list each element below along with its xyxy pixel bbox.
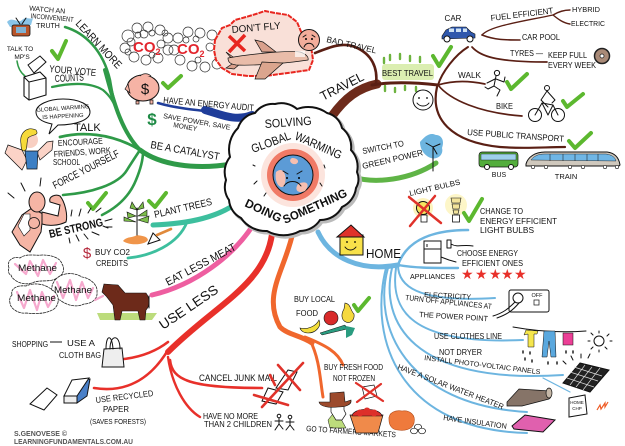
icon: cloth bag bbox=[102, 338, 124, 367]
text: choose energy efficient ones bbox=[457, 249, 523, 268]
public transport group: USE PUBLIC TRANSPORT bbox=[467, 127, 565, 144]
icon: two children bbox=[275, 414, 294, 430]
text: tyres keep full every week: KEEP FULL bbox=[548, 51, 587, 60]
text: buy co2 credits: BUY CO2 bbox=[95, 248, 131, 257]
energy audit group bbox=[125, 74, 255, 133]
text: change to energy efficient light bulbs: CHANGE TO bbox=[480, 207, 523, 216]
text: encourage friends, work, school bbox=[53, 136, 111, 167]
icon: cow bbox=[97, 284, 157, 320]
heading: talk: TALK bbox=[74, 122, 101, 134]
branch: home (light blue) bbox=[318, 230, 570, 433]
text: shopping use a cloth bag: CLOTH BAG bbox=[59, 351, 101, 360]
text: buy fresh food not frozen: NOT FROZEN bbox=[333, 374, 375, 383]
text: encourage friends, work, school: FRIENDS, WORK bbox=[53, 145, 111, 159]
icon: red cross bbox=[229, 35, 245, 52]
text: install photo-voltaic panels: INSTALL PHOTO-VOLTAIC PANELS bbox=[424, 355, 541, 376]
walk group bbox=[458, 70, 527, 96]
tick: walk bbox=[507, 74, 527, 89]
text: use recycled paper saves forests: USE RECYCLED bbox=[95, 388, 154, 405]
icon: green dollar: $ bbox=[147, 110, 157, 129]
branch: travel (brown) bbox=[315, 10, 570, 148]
icon: power point switch bbox=[493, 290, 549, 318]
home group bbox=[337, 177, 612, 432]
text: go to farmers markets: GO TO FARMERS MARKETS bbox=[306, 424, 396, 439]
text: save power, save money: SAVE POWER, SAVE bbox=[163, 113, 231, 132]
bike group: BIKE bbox=[496, 102, 513, 111]
text: plant trees: PLANT TREES bbox=[153, 197, 213, 221]
bike group bbox=[496, 86, 583, 122]
icon: five red stars: ★ bbox=[514, 266, 527, 282]
icon: solar panel bbox=[563, 354, 609, 392]
text: use clothes line not dryer: USE CLOTHES LINE bbox=[434, 332, 502, 341]
text: best travel: BEST TRAVEL bbox=[382, 69, 433, 78]
text: appliances: APPLIANCES bbox=[410, 272, 455, 281]
text: shopping use a cloth bag: USE A bbox=[67, 339, 96, 348]
icon: five red stars bbox=[461, 266, 527, 282]
text: buy fresh food not frozen: BUY FRESH FOOD bbox=[324, 363, 383, 372]
label: CO2 right: 2 bbox=[200, 49, 205, 59]
central topic cloud bbox=[225, 103, 360, 237]
icon: tyre bbox=[594, 48, 610, 64]
text: turn off appliances at the power point: TURN OFF APPLIANCES AT bbox=[405, 293, 493, 311]
central title: solving global warming: WARMING bbox=[293, 129, 344, 162]
text: change to energy efficient light bulbs: ENERGY EFFICIENT bbox=[480, 217, 557, 226]
text: have insulation: HAVE INSULATION bbox=[443, 413, 507, 431]
icon: blue car bbox=[442, 27, 475, 42]
branch: learn more and catalyst (green) bbox=[52, 27, 232, 215]
text: don't fly: DON'T FLY bbox=[231, 21, 281, 36]
text: encourage friends, work, school: SCHOOL bbox=[53, 157, 80, 167]
green power group: GREEN POWER bbox=[361, 147, 424, 171]
text: turn off appliances at the power point bbox=[405, 293, 493, 323]
text: choose energy efficient ones: EFFICIENT ONES bbox=[462, 259, 523, 268]
tick: be strong bbox=[88, 193, 106, 209]
text: buy fresh food not frozen bbox=[324, 363, 383, 383]
icon: sun bbox=[588, 331, 612, 352]
icon: strong man flexing bbox=[8, 178, 67, 252]
branch: use less (red) bbox=[94, 234, 272, 417]
use less group: USE LESS bbox=[156, 282, 221, 332]
text: have an energy audit: HAVE AN ENERGY AUDIT bbox=[163, 95, 255, 113]
tick: local food bbox=[354, 298, 369, 311]
text: use recycled paper saves forests: (SAVES FORESTS) bbox=[90, 417, 146, 426]
text: your vote counts: YOUR VOTE bbox=[49, 64, 97, 79]
icon: cyclist bbox=[528, 86, 564, 122]
icon: trowel bbox=[148, 229, 171, 244]
car group bbox=[442, 5, 610, 70]
heading: home: HOME bbox=[366, 247, 401, 261]
label: bus: BUS bbox=[492, 172, 507, 179]
text: encourage friends, work, school: ENCOURAGE bbox=[58, 136, 103, 148]
text: shopping use a cloth bag: SHOPPING bbox=[12, 340, 48, 349]
central title: solving global warming bbox=[249, 114, 344, 162]
icon: energy saving bulb bbox=[445, 194, 467, 222]
heading: force yourself: FORCE YOURSELF bbox=[51, 148, 121, 192]
speech bubble: global warming is happening: IS HAPPENING bbox=[42, 113, 84, 121]
icon: bus bbox=[479, 152, 518, 170]
globe with sad face bbox=[253, 143, 325, 207]
icon: television bbox=[7, 18, 33, 36]
heading: be a catalyst: BE A CATALYST bbox=[149, 139, 221, 163]
icon: five red stars: ★ bbox=[461, 266, 474, 282]
text: talk to MPs bbox=[7, 46, 33, 61]
central title: solving global warming: SOLVING bbox=[264, 114, 312, 131]
icon: washing line bbox=[513, 327, 586, 364]
label: methane top: Methane bbox=[18, 263, 57, 273]
icon: home CHP box: HOME bbox=[570, 400, 584, 405]
icon: tomato basket bbox=[350, 408, 383, 433]
methane clouds bbox=[8, 255, 103, 314]
credit: LEARNINGFUNDAMENTALS.COM.AU bbox=[14, 439, 133, 446]
topic: learn more: LEARN MORE bbox=[73, 18, 124, 71]
tick: transport bbox=[569, 133, 591, 148]
text: use recycled paper saves forests: PAPER bbox=[103, 404, 129, 414]
icon: five red stars: ★ bbox=[501, 266, 514, 282]
icon: insulation sheet bbox=[512, 415, 555, 432]
text: change to energy efficient light bulbs bbox=[480, 207, 557, 235]
local food group: BUY LOCAL bbox=[294, 294, 335, 304]
tick: your vote counts bbox=[52, 41, 66, 59]
icon: young tree bbox=[123, 202, 149, 244]
heading: travel: TRAVEL bbox=[318, 69, 366, 104]
branch: switch to green power bbox=[353, 163, 436, 180]
icon: home CHP box: CHP bbox=[572, 406, 582, 411]
walk group: WALK bbox=[458, 71, 482, 80]
green power group: SWITCH TO bbox=[361, 138, 405, 156]
text: watch an inconvenient truth: TRUTH bbox=[36, 23, 60, 30]
green power group bbox=[361, 134, 443, 171]
icon: sad face bbox=[298, 30, 320, 50]
text: watch an inconvenient truth: INCONVENIENT bbox=[30, 13, 74, 24]
icon: red dollar: $ bbox=[83, 245, 92, 262]
icon: pumpkin and eggs bbox=[389, 411, 426, 434]
tick: bike bbox=[563, 94, 583, 107]
text: light bulbs: LIGHT BULBS bbox=[408, 177, 461, 198]
icon: five red stars: ★ bbox=[475, 266, 488, 282]
local food group bbox=[294, 294, 426, 439]
text: turn off appliances at the power point: THE POWER POINT bbox=[419, 310, 489, 323]
icon: wind turbine bbox=[420, 134, 443, 171]
text: tyres keep full every week: EVERY WEEK bbox=[548, 61, 597, 70]
icon: fridge and appliance bbox=[424, 240, 473, 263]
icon: paper stack bbox=[30, 378, 90, 410]
label: train: TRAIN bbox=[555, 172, 577, 181]
label: CO2 right: CO bbox=[177, 41, 200, 58]
tick: light bulbs bbox=[464, 199, 482, 221]
icon: crossed out junk mail bbox=[254, 363, 303, 407]
text: fuel efficient: FUEL EFFICIENT bbox=[490, 5, 554, 23]
don't fly panel bbox=[214, 11, 320, 79]
text: buy co2 credits: CREDITS bbox=[96, 259, 128, 268]
text: hybrid: HYBRID bbox=[572, 7, 600, 14]
text: use clothes line not dryer bbox=[434, 332, 502, 357]
best travel group bbox=[382, 47, 451, 110]
use less group bbox=[12, 282, 303, 430]
text: your vote counts bbox=[49, 64, 97, 85]
branch: energy audit (dark blue) bbox=[158, 103, 252, 118]
heading: be strong: BE STRONG bbox=[48, 217, 104, 241]
tick: best travel bbox=[433, 47, 451, 66]
text: tyres keep full every week: TYRES — bbox=[510, 49, 543, 58]
icon: train bbox=[526, 152, 620, 169]
eat less meat group bbox=[8, 241, 239, 320]
icon: smiley bbox=[413, 90, 433, 110]
text: use recycled paper saves forests bbox=[90, 388, 154, 426]
local food group: FOOD bbox=[296, 308, 318, 318]
icon: home CHP box bbox=[569, 395, 608, 417]
icon: solar water heater roll bbox=[507, 388, 552, 406]
text: change to energy efficient light bulbs: LIGHT BULBS bbox=[480, 226, 534, 235]
text: cancel junk mail: CANCEL JUNK MAIL bbox=[199, 373, 277, 384]
eat less meat group: EAT LESS MEAT bbox=[164, 241, 239, 289]
icon: farmer with hat bbox=[319, 392, 351, 428]
label: CO2 left: 2 bbox=[156, 47, 161, 57]
text: have no more than 2 children: HAVE NO MORE bbox=[203, 412, 258, 421]
credit: S.GENOVESE © bbox=[14, 430, 68, 438]
icon: five red stars: ★ bbox=[489, 266, 502, 282]
icon: piggy bank: $ bbox=[141, 81, 150, 98]
credit bbox=[14, 430, 133, 446]
icon: power point switch: OFF bbox=[532, 293, 543, 299]
label: methane right: Methane bbox=[54, 285, 92, 295]
text: electricity: ELECTRICITY bbox=[424, 290, 471, 301]
text: tyres keep full every week bbox=[510, 49, 597, 70]
text: talk to MPs: MP'S bbox=[14, 54, 30, 61]
icon: walking person bbox=[485, 70, 505, 96]
plant trees group bbox=[83, 193, 213, 268]
label: CO2 left: CO bbox=[133, 39, 156, 56]
text: shopping use a cloth bag bbox=[12, 339, 101, 360]
text: bad travel: BAD TRAVEL bbox=[326, 34, 378, 55]
text: have a solar water heater: HAVE A SOLAR WATER HEATER bbox=[396, 362, 505, 411]
text: watch an inconvenient truth: WATCH AN bbox=[29, 5, 65, 16]
branch: plant trees (teal) bbox=[128, 202, 238, 258]
car group: CAR bbox=[445, 14, 462, 23]
tick: piggy bank bbox=[163, 76, 181, 88]
text: use clothes line not dryer: NOT DRYER bbox=[439, 348, 482, 357]
central subtitle: doing something bbox=[243, 186, 349, 227]
text: watch an inconvenient truth bbox=[29, 5, 74, 30]
central subtitle: doing something: SOMETHING bbox=[281, 186, 349, 227]
text: electric: ELECTRIC bbox=[571, 21, 605, 28]
text: car pool: CAR POOL bbox=[522, 32, 560, 42]
text: buy co2 credits bbox=[95, 248, 131, 268]
icon: fruit and vegetables bbox=[300, 303, 355, 338]
label: methane bottom: Methane bbox=[17, 293, 56, 303]
text: choose energy efficient ones: CHOOSE ENERGY bbox=[457, 249, 519, 258]
tick: plant trees bbox=[149, 193, 166, 207]
central title: solving global warming: GLOBAL bbox=[249, 129, 293, 156]
branch: buy local food (orange) bbox=[273, 232, 343, 397]
icon: crossed out old bulb bbox=[409, 196, 441, 226]
icon: woman talking bbox=[5, 129, 53, 170]
text: save power, save money: MONEY bbox=[173, 122, 198, 133]
speech bubble: global warming is happening bbox=[36, 99, 90, 134]
text: talk to MPs: TALK TO bbox=[7, 46, 33, 53]
icon: ballot box bbox=[24, 56, 46, 100]
CO2 clouds bbox=[120, 22, 230, 72]
icon: crossed out frozen food bbox=[356, 383, 383, 402]
text: your vote counts: COUNTS bbox=[55, 72, 84, 85]
text: have no more than 2 children: THAN 2 CHILDREN bbox=[204, 420, 272, 429]
speech bubble: global warming is happening: GLOBAL WARMING bbox=[36, 104, 90, 114]
text: have no more than 2 children bbox=[203, 412, 272, 429]
icon: aeroplane bbox=[226, 40, 308, 79]
topic: learn more bbox=[5, 5, 221, 252]
central subtitle: doing something: DOING bbox=[243, 196, 284, 225]
public transport group bbox=[467, 127, 620, 181]
branch: eat less meat (pink) bbox=[152, 222, 255, 295]
icon: smiling house bbox=[337, 225, 364, 255]
